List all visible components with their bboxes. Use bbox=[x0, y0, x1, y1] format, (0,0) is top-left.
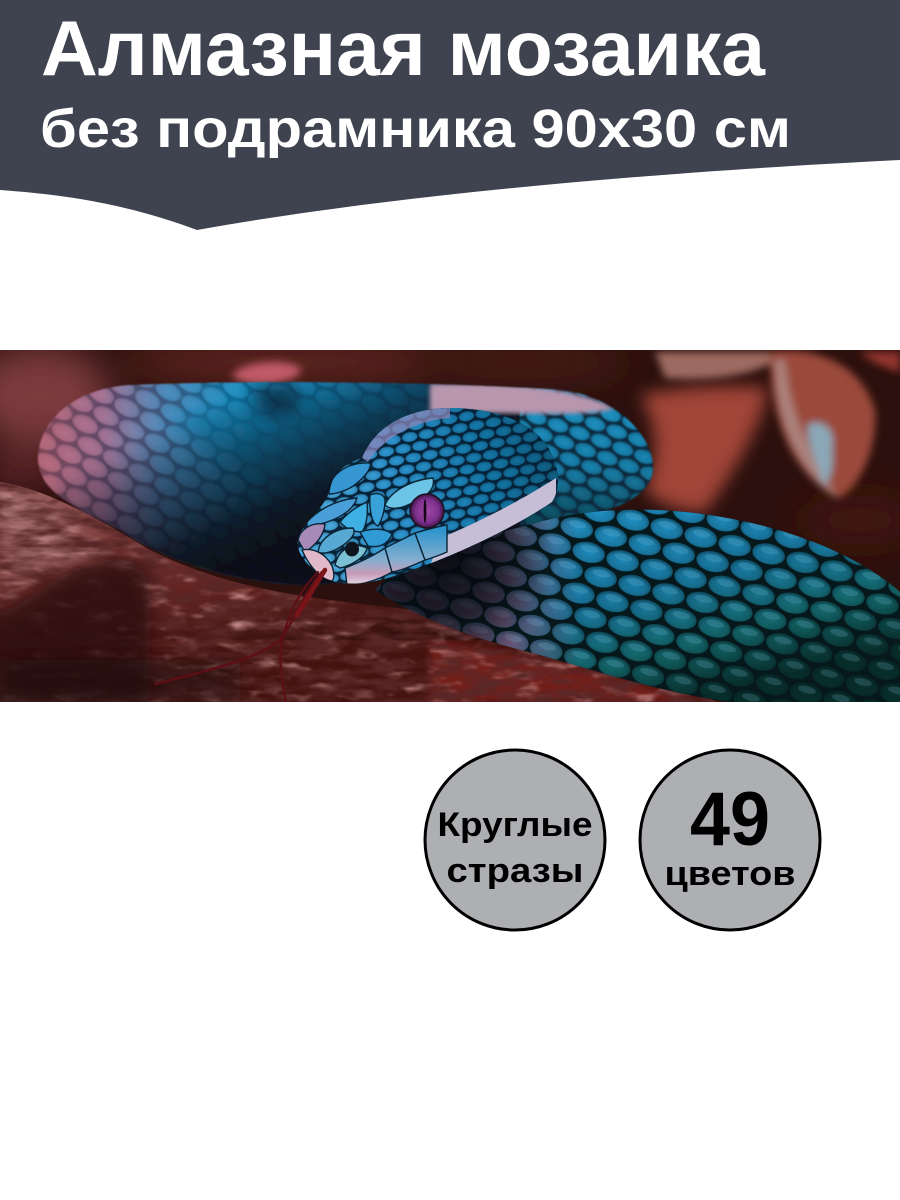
badge: 49 colours: цветов bbox=[664, 855, 796, 893]
header banner bbox=[0, 0, 900, 230]
nostril bbox=[345, 542, 359, 556]
badge: round rhinestones: стразы bbox=[446, 852, 584, 890]
badge: 49 colours bbox=[640, 750, 820, 930]
front body of snake bbox=[375, 510, 900, 702]
badge: round rhinestones: Круглые bbox=[438, 806, 592, 844]
head plates bbox=[298, 463, 447, 585]
snake head bbox=[298, 408, 558, 584]
picture background foliage bbox=[0, 342, 900, 702]
log bbox=[0, 480, 760, 702]
forked tongue bbox=[155, 570, 325, 702]
blurred red leaf bbox=[640, 386, 768, 512]
badge: round rhinestones bbox=[425, 750, 605, 930]
snake picture bbox=[0, 342, 900, 710]
lower jaw bbox=[430, 478, 556, 566]
title: Алмазная мозаика bbox=[41, 4, 766, 92]
badge: 49 colours: 49 bbox=[690, 777, 770, 862]
back coil of snake bbox=[37, 381, 654, 586]
subtitle: без подрамника 90х30 см bbox=[40, 99, 791, 159]
eye bbox=[410, 494, 444, 528]
head rim bbox=[362, 408, 450, 462]
